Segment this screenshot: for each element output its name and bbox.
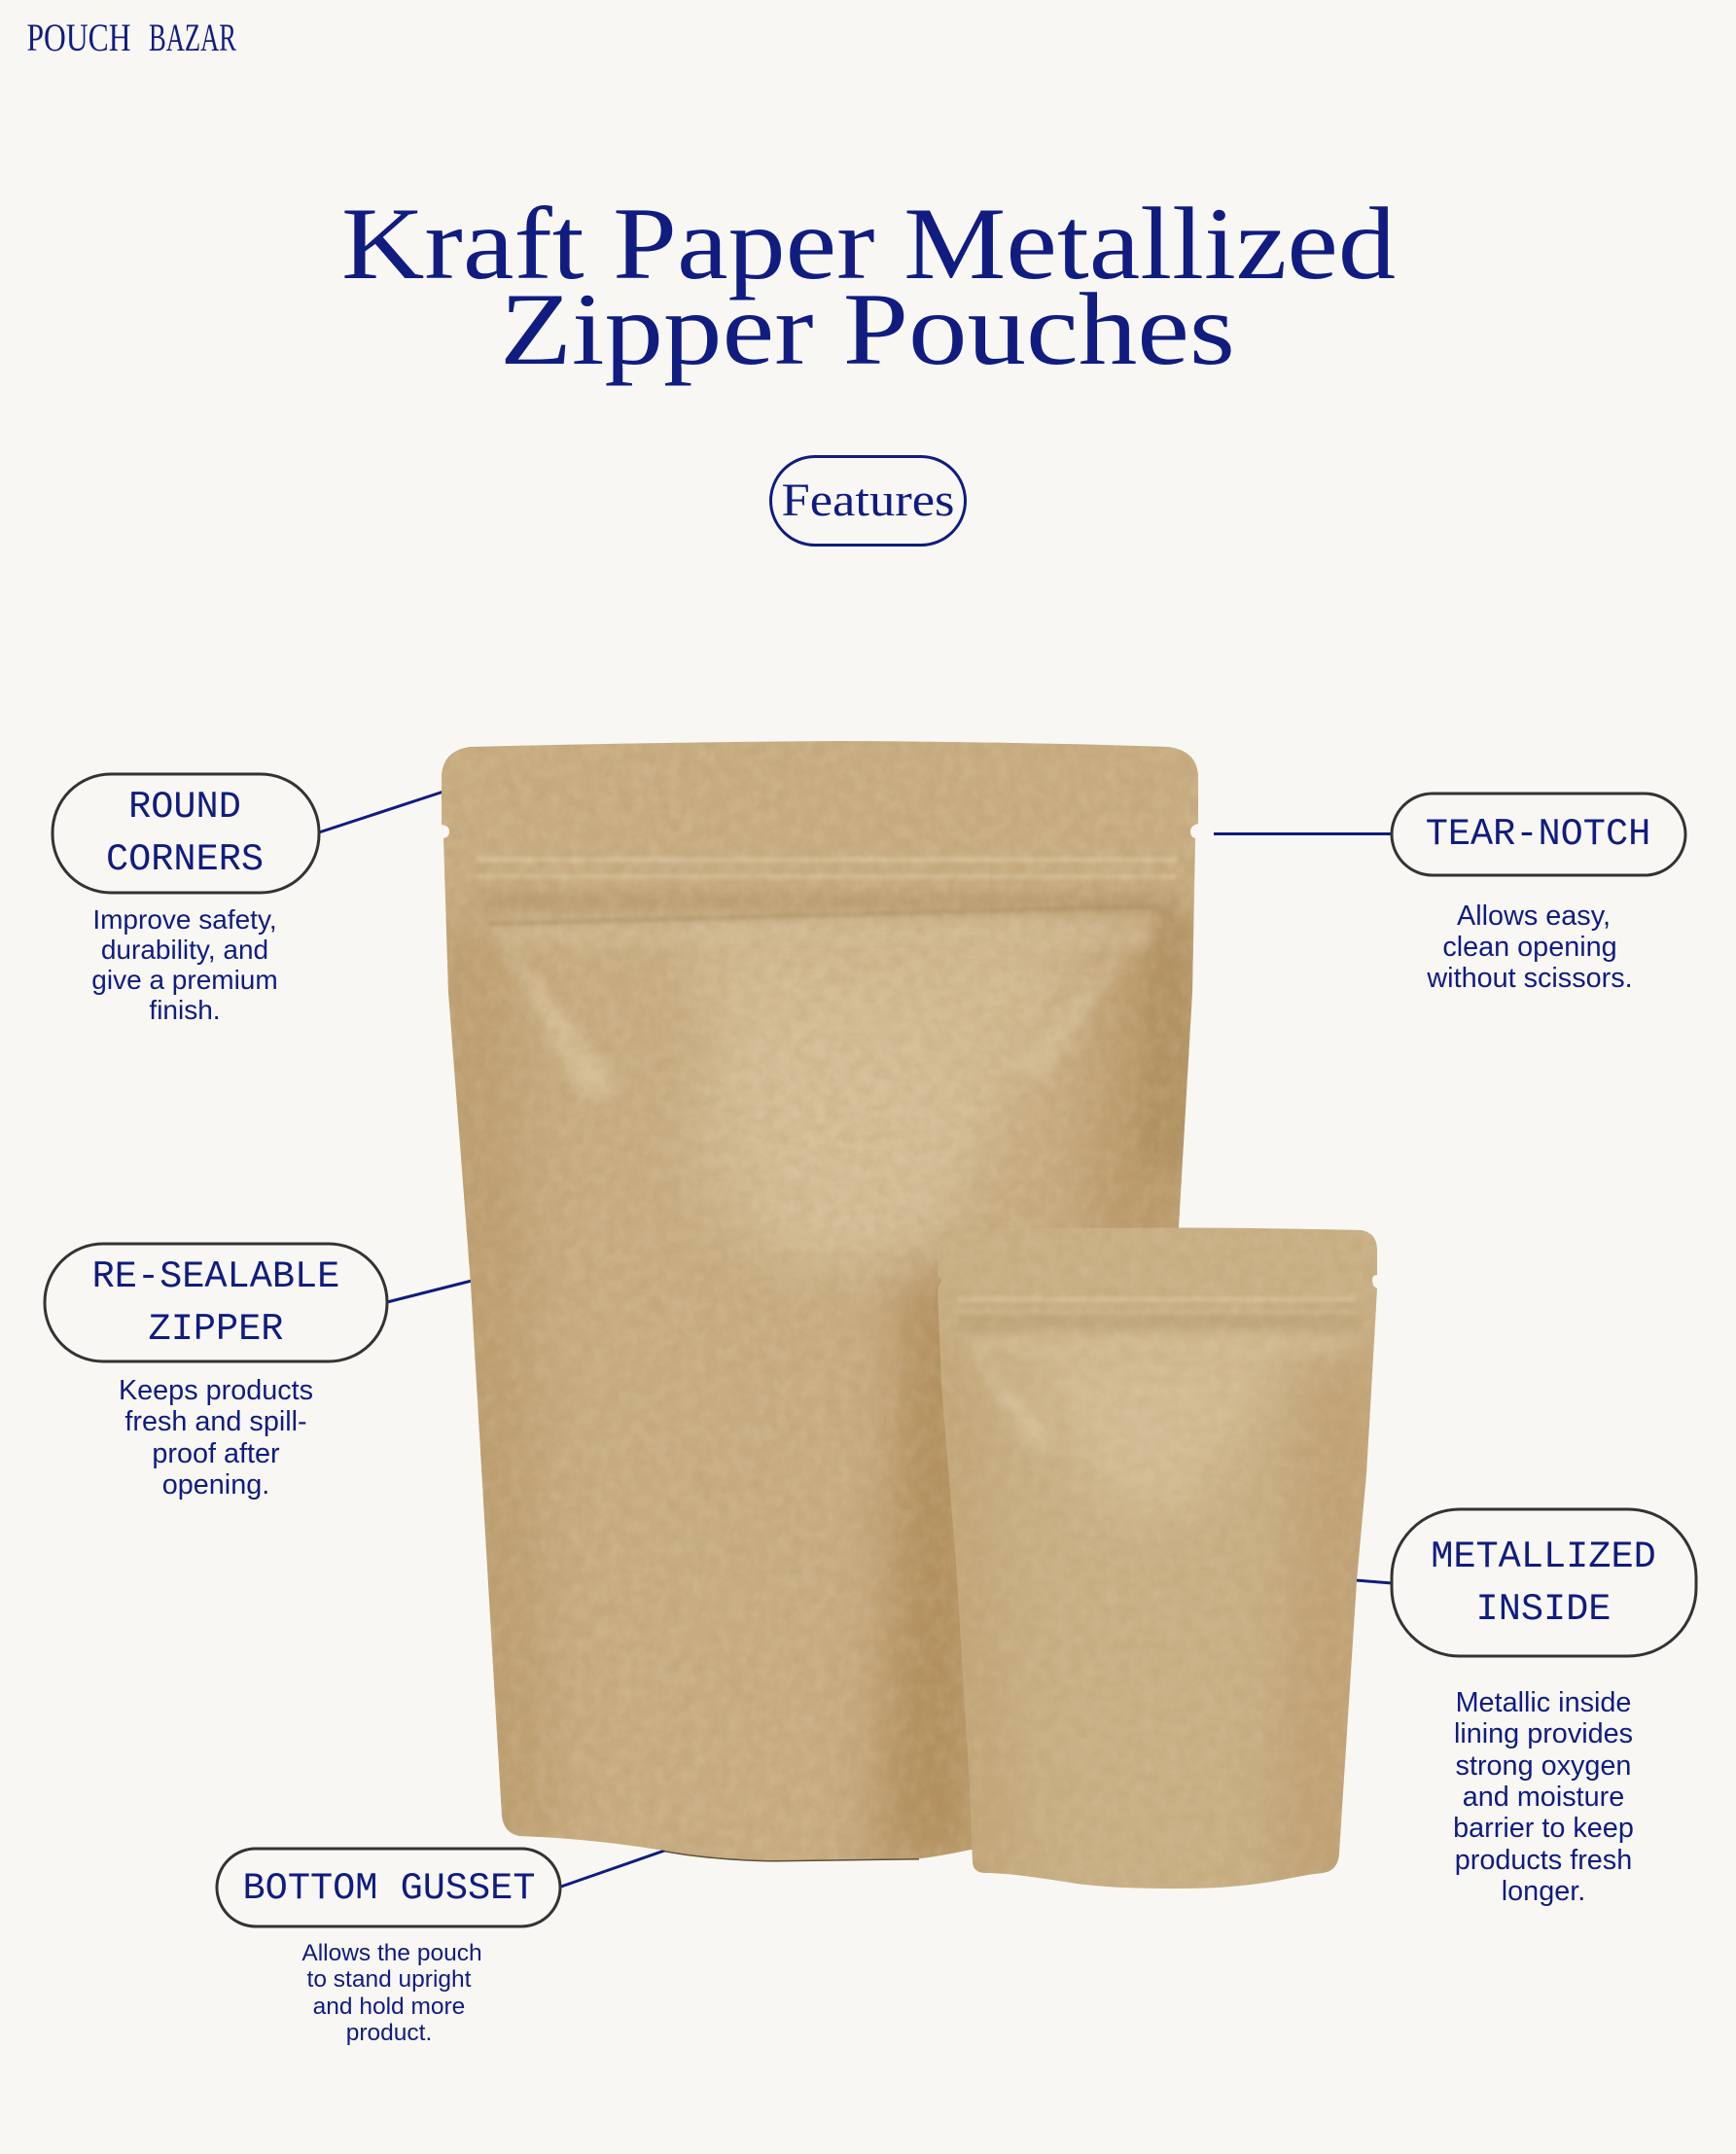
callout: re-sealable zipper: ZIPPER [149, 1308, 283, 1351]
callout: metallized inside [1392, 1509, 1696, 1907]
callout: bottom gusset [217, 1849, 560, 2046]
callout: tear-notch: TEAR-NOTCH [1426, 813, 1650, 856]
callout: tear-notch [1392, 794, 1685, 994]
description: metallized inside: products fresh [1455, 1845, 1632, 1876]
callout: bottom gusset: BOTTOM GUSSET [243, 1867, 535, 1910]
description: re-sealable zipper: Keeps products [119, 1375, 313, 1406]
callout: re-sealable zipper: RE-SEALABLE [92, 1255, 339, 1298]
description: metallized inside: strong oxygen [1456, 1750, 1631, 1782]
callout: re-sealable zipper [45, 1244, 387, 1501]
description: metallized inside: barrier to keep [1453, 1813, 1634, 1844]
description: bottom gusset [301, 1940, 482, 2046]
description: metallized inside: and moisture [1463, 1782, 1624, 1813]
description: tear-notch [1426, 900, 1633, 994]
description: bottom gusset: to stand upright [307, 1966, 472, 1993]
description: tear-notch: without scissors. [1426, 963, 1633, 994]
callout: round corners: CORNERS [106, 838, 264, 881]
description: round corners [91, 904, 278, 1025]
connector: bottom gusset [561, 1850, 667, 1887]
description: round corners: finish. [149, 995, 221, 1025]
description: bottom gusset: Allows the pouch [301, 1940, 482, 1966]
description: metallized inside [1453, 1687, 1634, 1907]
connector: re-sealable zipper [387, 1281, 472, 1302]
description: metallized inside: lining provides [1454, 1718, 1633, 1749]
small kraft pouch [924, 1220, 1391, 1901]
title [341, 187, 1396, 386]
description: round corners: durability, and [101, 935, 268, 965]
callout: round corners: ROUND [128, 786, 241, 829]
gusset shading [428, 914, 1206, 1867]
description: tear-notch: Allows easy, [1457, 900, 1611, 932]
callout: round corners [53, 774, 319, 1025]
connector: tear-notch [1214, 832, 1392, 835]
connector: round corners [319, 792, 443, 832]
callout: metallized inside: METALLIZED [1431, 1536, 1656, 1578]
logo [27, 16, 236, 59]
features badge: Features [782, 475, 955, 526]
description: round corners: Improve safety, [92, 904, 277, 935]
title: Zipper Pouches [500, 272, 1235, 386]
title: Kraft Paper Metallized [341, 187, 1396, 300]
description: metallized inside: longer. [1502, 1876, 1585, 1907]
description: bottom gusset: and hold more [313, 1994, 465, 2020]
logo: POUCH [27, 16, 130, 59]
features badge [770, 457, 965, 545]
description: bottom gusset: product. [346, 2020, 432, 2046]
description: re-sealable zipper: fresh and spill- [124, 1406, 307, 1437]
large kraft pouch [428, 729, 1216, 1877]
description: metallized inside: Metallic inside [1456, 1687, 1631, 1718]
callout: metallized inside: INSIDE [1476, 1588, 1611, 1631]
description: re-sealable zipper: opening. [162, 1469, 269, 1501]
description: tear-notch: clean opening [1442, 932, 1617, 963]
connector: metallized inside [1356, 1580, 1392, 1583]
description: re-sealable zipper [119, 1375, 313, 1501]
description: round corners: give a premium [91, 965, 278, 995]
logo: BAZAR [149, 16, 236, 59]
zipper band [477, 893, 1192, 1167]
description: re-sealable zipper: proof after [152, 1438, 280, 1469]
